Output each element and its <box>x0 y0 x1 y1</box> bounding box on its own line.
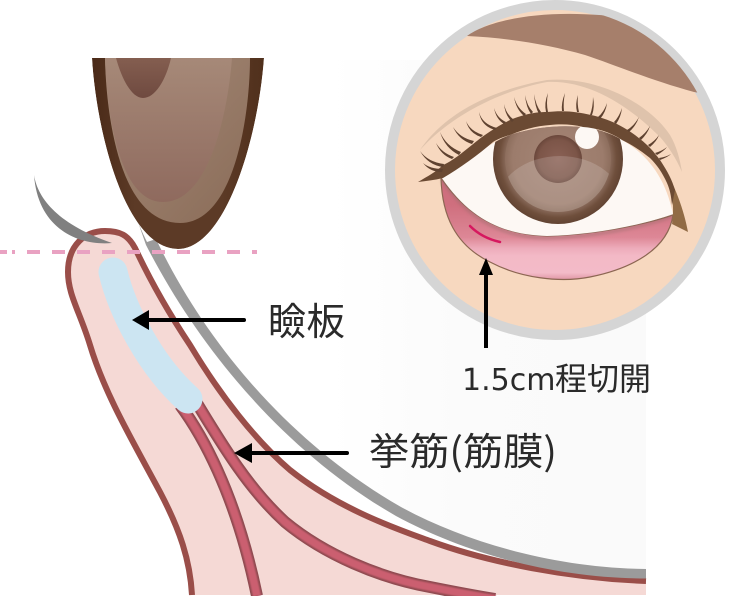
dashed guide line <box>0 250 257 254</box>
iris <box>493 126 623 224</box>
arrow: tarsal plate <box>132 310 244 330</box>
eye white <box>442 126 673 236</box>
eyelashes <box>420 93 671 172</box>
eye white shadow <box>442 180 673 238</box>
incision mark <box>470 226 500 242</box>
label: tarsal plate: 瞼板 <box>268 291 345 346</box>
lid cross-section <box>68 231 646 596</box>
tarsal plate <box>113 272 188 399</box>
outer lid tail <box>660 160 688 232</box>
label: incision: 程切開 <box>555 354 651 400</box>
upper lid line <box>418 111 675 205</box>
label: incision: 1.5cm <box>462 363 555 398</box>
highlight <box>575 125 599 149</box>
eye detail circle <box>390 5 735 335</box>
eyeball outline <box>138 222 646 578</box>
eyelid crease <box>420 80 682 172</box>
eyeball cross-section <box>92 58 264 249</box>
conjunctiva <box>441 178 673 279</box>
eyebrow <box>467 14 698 93</box>
arrow: levator <box>234 443 347 463</box>
skin <box>390 5 720 335</box>
eyelash cross-section <box>34 175 112 243</box>
eyelid tissue <box>68 231 646 595</box>
label: levator fascia: 挙筋(筋膜) <box>369 421 557 476</box>
arrow: incision <box>479 258 493 348</box>
levator muscle <box>180 395 495 596</box>
background panel <box>330 60 646 574</box>
eyelid outline <box>68 231 646 595</box>
